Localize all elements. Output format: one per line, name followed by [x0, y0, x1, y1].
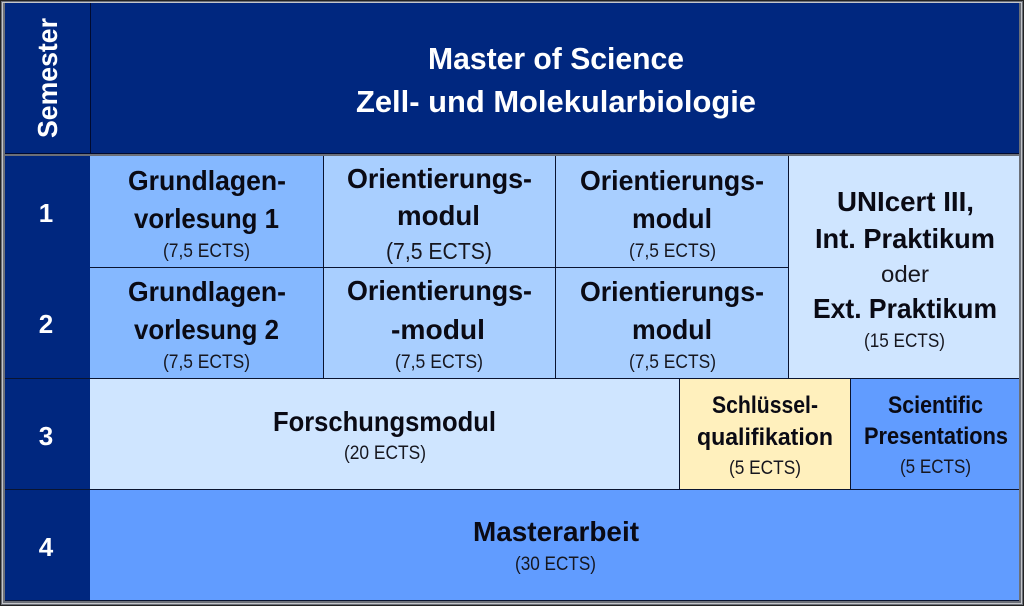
module: Orientierungsmodul 2a: Orientierungs-	[347, 275, 532, 306]
module: UNIcert III / Praktikum	[789, 156, 1019, 378]
module: Orientierungsmodul 1a: modul	[397, 200, 480, 231]
module: Grundlagenvorlesung 2: Grundlagen-	[128, 276, 286, 307]
module: Orientierungsmodul 1a	[324, 156, 555, 267]
module: UNIcert III / Praktikum: UNIcert III,	[837, 186, 974, 217]
heading: Semester: Semester	[32, 18, 63, 138]
module: Grundlagenvorlesung 1: vorlesung 1	[134, 203, 279, 234]
panel: semester numbers: 1	[39, 198, 53, 228]
module: UNIcert III / Praktikum: Ext. Praktikum	[813, 293, 997, 324]
panel: semester numbers: 2	[39, 309, 53, 339]
module: UNIcert III / Praktikum: oder	[881, 261, 929, 287]
module: Orientierungsmodul 1b: modul	[632, 203, 712, 234]
module: Grundlagenvorlesung 1: (7,5 ECTS)	[163, 240, 250, 262]
module: Orientierungsmodul 1b: Orientierungs-	[580, 165, 764, 196]
module: Masterarbeit: (30 ECTS)	[515, 553, 596, 575]
title: Zell- und Molekularbiologie	[356, 84, 756, 119]
module: Forschungsmodul: Forschungsmodul	[273, 406, 496, 437]
module: Orientierungsmodul 2a: -modul	[391, 314, 485, 345]
module: UNIcert III / Praktikum: (15 ECTS)	[864, 330, 945, 352]
module: Orientierungsmodul 2a: (7,5 ECTS)	[395, 351, 483, 373]
module: Scientific Presentations: (5 ECTS)	[900, 456, 971, 478]
module: Grundlagenvorlesung 2: vorlesung 2	[134, 314, 279, 345]
panel: header	[5, 3, 1019, 154]
panel: semester numbers	[5, 156, 90, 600]
module: Masterarbeit	[90, 490, 1019, 600]
module: Orientierungsmodul 2a	[324, 268, 555, 378]
panel: semester numbers: 3	[39, 421, 53, 451]
module: Forschungsmodul	[90, 379, 679, 489]
module: Scientific Presentations: Scientific	[888, 392, 983, 419]
title	[356, 41, 756, 119]
module: Schlüsselqualifikation: qualifikation	[697, 424, 833, 451]
module: Schlüsselqualifikation: Schlüssel-	[712, 392, 818, 419]
module: Masterarbeit: Masterarbeit	[473, 516, 639, 547]
module: Scientific Presentations	[851, 379, 1019, 489]
module: Orientierungsmodul 2b: modul	[632, 314, 712, 345]
module: Orientierungsmodul 2b: Orientierungs-	[580, 276, 764, 307]
module: Orientierungsmodul 1b	[556, 156, 788, 267]
module: UNIcert III / Praktikum: Int. Praktikum	[815, 223, 995, 254]
module: Orientierungsmodul 1a: (7,5 ECTS)	[386, 238, 492, 264]
panel: semester numbers: 4	[39, 532, 54, 562]
module: Scientific Presentations: Presentations	[864, 423, 1008, 450]
module: Grundlagenvorlesung 1	[90, 156, 323, 267]
module: Orientierungsmodul 2b	[556, 268, 788, 378]
module: Orientierungsmodul 1a: Orientierungs-	[347, 163, 532, 194]
module: Grundlagenvorlesung 2	[90, 268, 323, 378]
module: Schlüsselqualifikation: (5 ECTS)	[729, 457, 801, 479]
module: Grundlagenvorlesung 1: Grundlagen-	[128, 165, 286, 196]
module: Forschungsmodul: (20 ECTS)	[344, 442, 426, 464]
title: Master of Science	[428, 41, 684, 76]
module: Schlüsselqualifikation	[680, 379, 850, 489]
module: Orientierungsmodul 1b: (7,5 ECTS)	[629, 240, 716, 262]
module: Grundlagenvorlesung 2: (7,5 ECTS)	[163, 351, 250, 373]
module: Orientierungsmodul 2b: (7,5 ECTS)	[629, 351, 716, 373]
